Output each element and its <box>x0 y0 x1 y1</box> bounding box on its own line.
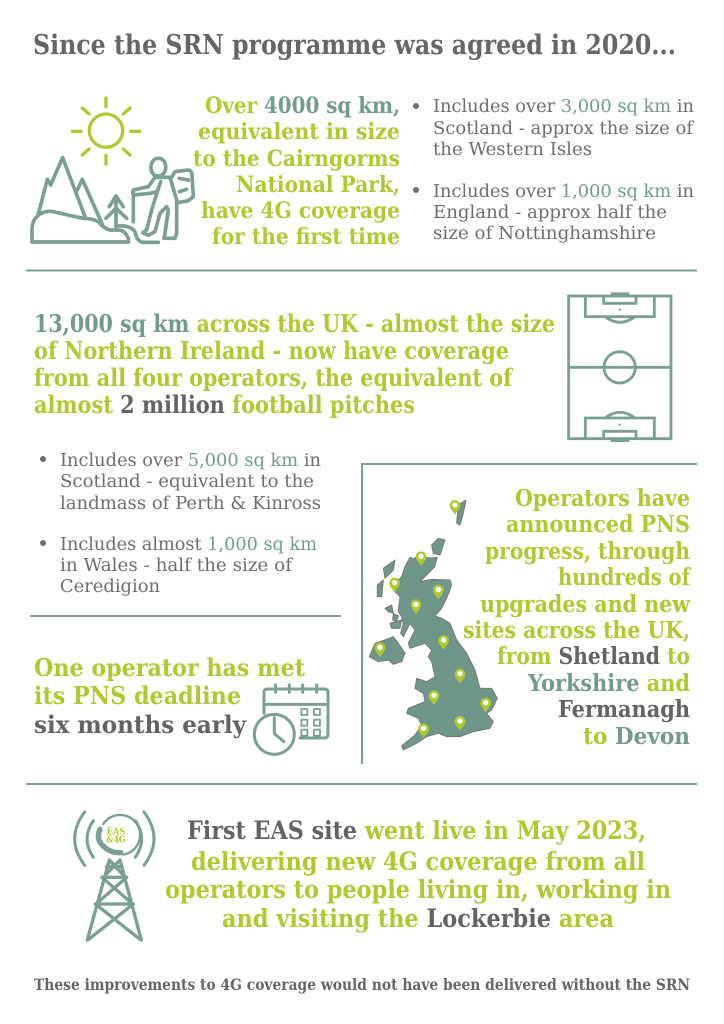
bullet list: Scotland and Wales coverage <box>40 451 321 597</box>
icon: EAS 4G phone mast: &4G <box>106 835 126 846</box>
heading: 13,000 sq km <box>34 309 555 419</box>
heading: 13,000 sq km: of Northern Ireland - now have coverage <box>34 336 509 365</box>
heading: first EAS site: First EAS site went live in May 2023, <box>187 816 646 845</box>
heading: PNS deadline: its PNS deadline <box>34 681 241 710</box>
heading: PNS progress: Yorkshire and <box>527 670 690 697</box>
icon: EAS 4G phone mast <box>75 812 154 940</box>
heading: first EAS site <box>165 816 671 933</box>
heading: PNS deadline: One operator has met <box>34 653 305 682</box>
icon: calendar and clock <box>254 685 328 754</box>
heading: 4000 sq km: Over 4000 sq km, <box>205 93 400 119</box>
icon: mountains <box>32 158 128 242</box>
heading: 4000 sq km: for the first time <box>212 224 400 250</box>
bullet list: Scotland and England coverage <box>413 97 695 244</box>
heading: PNS progress: sites across the UK, <box>463 617 690 644</box>
icon: football pitch <box>569 294 671 440</box>
heading: PNS progress: progress, through <box>485 538 690 565</box>
heading: PNS progress: hundreds of <box>558 564 692 591</box>
icon: EAS 4G phone mast: EAS <box>107 826 125 837</box>
map pins <box>375 500 491 738</box>
heading: 4000 sq km: to the Cairngorms <box>193 146 400 172</box>
heading: 13,000 sq km: 13,000 sq km across the UK - almost the size <box>34 309 555 338</box>
heading: PNS progress: upgrades and new <box>480 591 691 618</box>
heading: PNS progress: to Devon <box>583 723 690 750</box>
heading: PNS deadline <box>34 653 305 739</box>
heading: 4000 sq km <box>193 93 400 250</box>
bullet list: Scotland and Wales coverage: Includes over 5,000 sq km in <box>60 451 321 471</box>
heading: first EAS site: operators to people living in, working in <box>165 875 671 904</box>
heading: 13,000 sq km: almost 2 million football pitches <box>34 390 415 419</box>
heading: PNS progress: announced PNS <box>506 511 690 538</box>
heading: first EAS site: and visiting the Lockerbie area <box>222 904 614 933</box>
bullet list: Scotland and England coverage: England - approx half the <box>433 203 667 223</box>
bullet list: Scotland and Wales coverage: Includes almost 1,000 sq km <box>60 535 317 555</box>
map: UK with location pins <box>369 500 497 750</box>
heading: PNS progress <box>463 485 692 750</box>
bullet list: Scotland and England coverage: Scotland - approx the size of <box>433 119 695 139</box>
icon: sun and hiker with mountains <box>32 98 193 242</box>
bullet list: Scotland and England coverage: Includes over 3,000 sq km in <box>433 97 694 117</box>
heading: PNS progress: from Shetland to <box>497 643 690 670</box>
bullet list: Scotland and England coverage: the Western Isles <box>433 140 592 160</box>
bullet list: Scotland and Wales coverage: in Wales - half the size of <box>60 556 294 576</box>
heading: first EAS site: delivering new 4G coverage from all <box>191 847 645 876</box>
heading: 4000 sq km: have 4G coverage <box>201 198 400 224</box>
bullet list: Scotland and England coverage: Includes over 1,000 sq km in <box>433 182 694 202</box>
heading: 13,000 sq km: from all four operators, the equivalent of <box>34 363 513 392</box>
heading: PNS progress: Fermanagh <box>558 696 690 723</box>
bullet list: Scotland and England coverage: size of Nottinghamshire <box>433 224 656 244</box>
bullet list: Scotland and Wales coverage: Ceredigion <box>60 577 160 597</box>
icon: sun <box>72 98 140 164</box>
heading: 4000 sq km: equivalent in size <box>198 119 400 145</box>
bullet list: Scotland and Wales coverage: landmass of Perth & Kinross <box>60 494 321 514</box>
heading: PNS progress: Operators have <box>515 485 690 512</box>
heading: PNS deadline: six months early <box>34 710 247 739</box>
heading: 4000 sq km: National Park, <box>236 172 400 198</box>
icon: hiker <box>119 158 193 242</box>
bullet list: Scotland and Wales coverage: Scotland - equivalent to the <box>60 472 314 492</box>
